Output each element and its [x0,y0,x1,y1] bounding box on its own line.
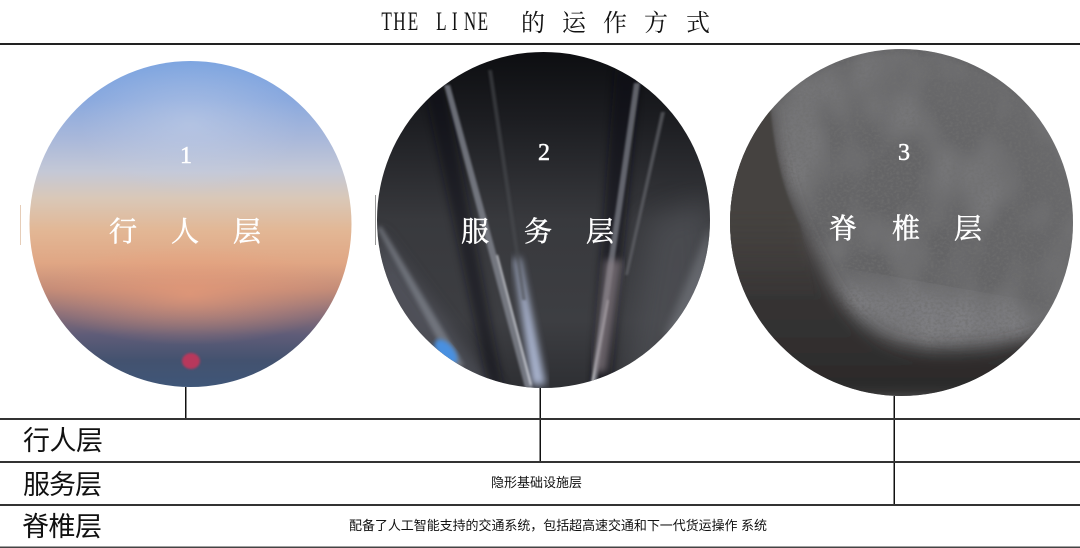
icon: setting sun [182,353,200,369]
connector: layer 3 [894,396,895,505]
title: 的运作方式 [521,10,710,37]
circle 1: pedestrian layer [20,55,352,387]
number 2: 2 [538,140,550,166]
label: 脊椎层: 脊椎层 [829,213,982,245]
circle 3: spine layer [720,48,1080,400]
row label: 行人层: 行人层 [23,426,103,456]
title: THELINE [381,6,488,36]
connector: layer 1 [185,387,186,419]
number 3: 3 [898,140,910,166]
header rule [0,43,1080,45]
label: 行人层: 行人层 [109,216,261,248]
title [381,6,710,37]
label: 服务层: 服务层 [461,216,614,248]
circle 2: service layer [375,52,710,395]
number 1: 1 [180,143,192,169]
connector: layer 2 [540,388,541,462]
row label: 脊椎层: 脊椎层 [22,512,102,542]
description: service layer: 隐形基础设施层 [491,475,582,490]
row label: 服务层: 服务层 [23,470,102,500]
table rules [0,418,1080,420]
description: spine layer: 配备了人工智能支持的交通系统，包括超高速交通和下一代货运操作 系统 [349,518,767,533]
